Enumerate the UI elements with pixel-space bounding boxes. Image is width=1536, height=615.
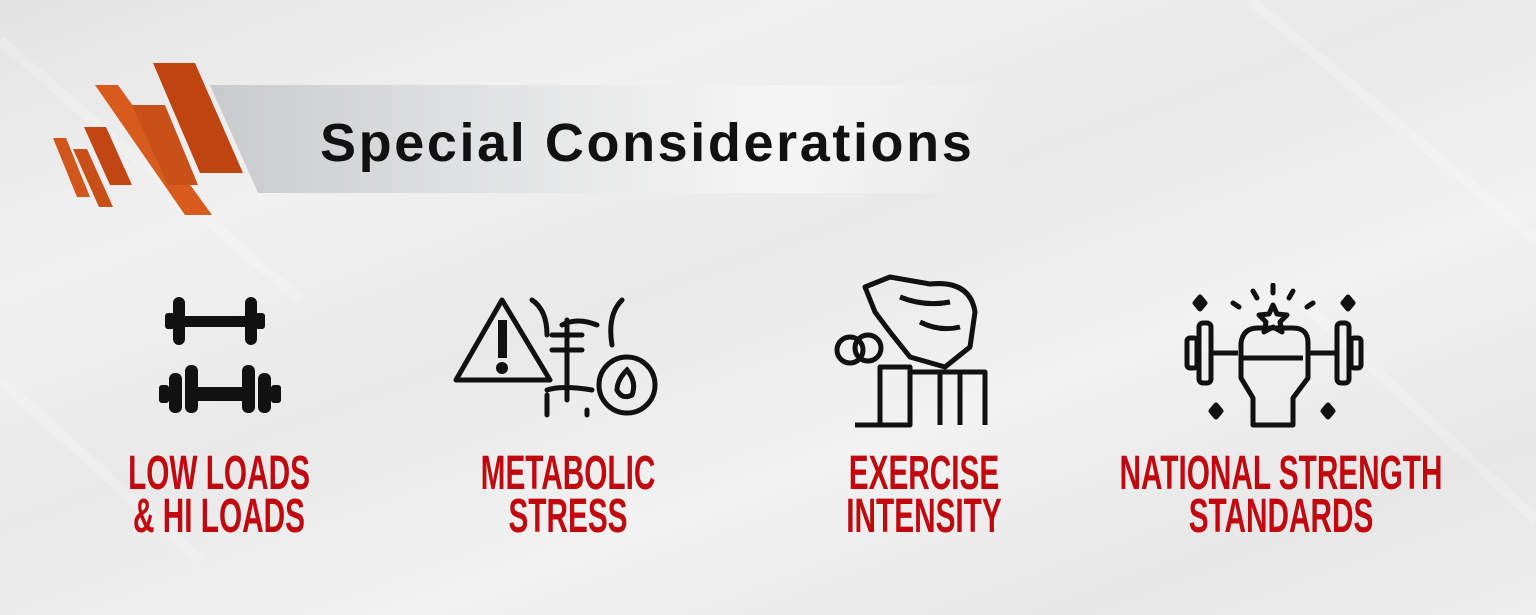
label: low loads — [128, 447, 310, 543]
icon: metabolic stress — [454, 298, 658, 418]
icon: exercise intensity — [834, 274, 988, 428]
label: exercise intensity: INTENSITY — [846, 490, 1002, 543]
label: metabolic stress — [481, 447, 655, 543]
label: metabolic stress: STRESS — [508, 490, 628, 543]
title: Special Considerations — [320, 113, 974, 173]
title band — [210, 85, 830, 193]
label: national strength standards — [1120, 447, 1442, 543]
label: national strength standards: NATIONAL STRENGTH — [1120, 447, 1442, 500]
label: low loads: & HI LOADS — [133, 490, 305, 543]
icon: strength standards — [1184, 283, 1364, 428]
icon: dumbbells — [159, 297, 281, 413]
logo bars — [53, 63, 243, 215]
label: national strength standards: STANDARDS — [1189, 490, 1373, 543]
label: exercise intensity: EXERCISE — [849, 447, 999, 500]
label: metabolic stress: METABOLIC — [481, 447, 655, 500]
label: low loads: LOW LOADS — [128, 447, 310, 500]
label: exercise intensity — [846, 447, 1002, 543]
